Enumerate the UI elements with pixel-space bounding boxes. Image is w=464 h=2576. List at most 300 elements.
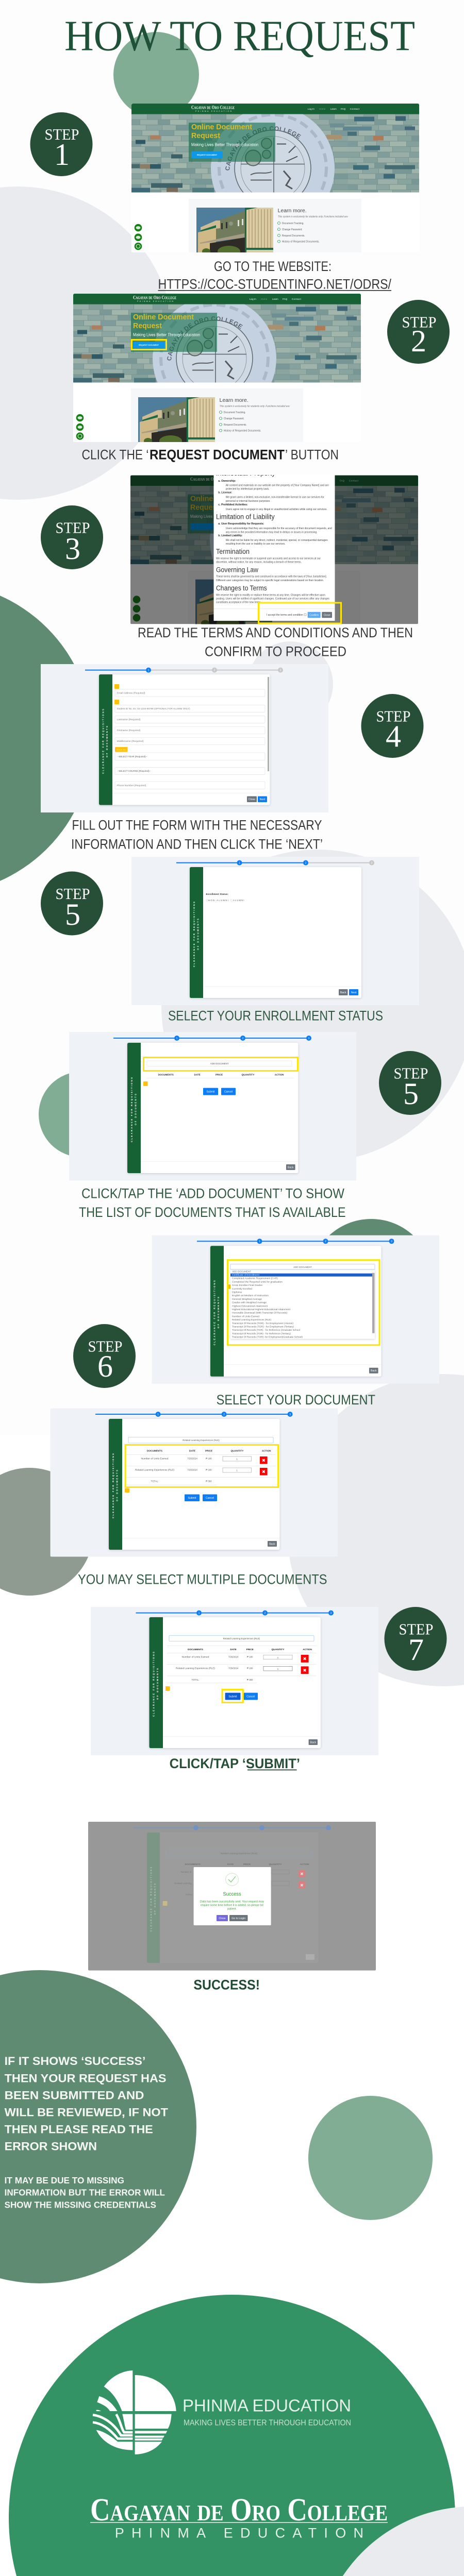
form card: ACTION bbox=[303, 1648, 312, 1651]
stepper: 3 bbox=[371, 861, 373, 865]
screenshot: step 3 terms and conditions bbox=[130, 469, 418, 629]
form card: Student ID No. Ex: 02-1234-56789 (OPTIONAL FOR ALUMNI ONLY) bbox=[117, 707, 190, 710]
terms modal: Termination bbox=[216, 548, 250, 555]
terms modal: These terms shall be governed by and construed in accordance with the laws of [Your Jurisdiction]. bbox=[216, 575, 327, 579]
nav bar: Learn bbox=[330, 108, 337, 110]
terms modal: c. Prohibited Activities: bbox=[218, 503, 248, 506]
form card: DOCUMENTS bbox=[158, 1074, 174, 1076]
form card: DATE bbox=[230, 1648, 237, 1651]
form card: 1 bbox=[277, 1668, 279, 1670]
caption: select document: SELECT YOUR DOCUMENT bbox=[217, 1392, 375, 1408]
terms modal: Different user categories may be subject to specific legal considerations based on their location. bbox=[216, 579, 324, 582]
note text: success explanation: THEN YOUR REQUEST HAS bbox=[5, 2072, 167, 2084]
screenshot: step 7 submit bbox=[91, 1607, 378, 1755]
screenshot: step 3 terms and conditions: Making Lives Better Through Education bbox=[190, 514, 257, 519]
step 7 badge: 7 bbox=[408, 1633, 424, 1667]
stepper: 3 bbox=[330, 1612, 332, 1615]
learn more panel: This system is exclusively for students only. Functions included are: bbox=[220, 405, 290, 408]
step 1 badge bbox=[30, 112, 93, 176]
success modal bbox=[194, 1867, 271, 1925]
terms modal: All content and materials on our website are the property of [Your Company Name] and are bbox=[226, 484, 329, 487]
screenshot: step 3 terms and conditions: Contact bbox=[349, 480, 359, 482]
note text: success explanation: ERROR SHOWN bbox=[5, 2140, 97, 2153]
caption: success: SUCCESS! bbox=[193, 1977, 260, 1993]
terms modal: personal or internal business purposes. bbox=[226, 500, 271, 503]
terms modal: Confirm bbox=[309, 614, 319, 617]
step 2 badge bbox=[387, 300, 450, 364]
hero overlay panel: Online Document bbox=[133, 313, 194, 321]
caption: multiple documents: YOU MAY SELECT MULTIPLE DOCUMENTS bbox=[78, 1572, 327, 1587]
decorative circle: bottom right light green bbox=[308, 2096, 433, 2220]
screenshot: multiple documents bbox=[51, 1409, 338, 1557]
form card: TOTAL: bbox=[151, 1480, 158, 1483]
success modal: require some time before it is added, so please be bbox=[201, 1904, 263, 1907]
form card: Submit bbox=[228, 1695, 237, 1698]
learn more panel: History of Requested Documents. bbox=[224, 430, 261, 433]
screenshot: step 3 terms and conditions: FAQ bbox=[340, 480, 345, 482]
hero photo bbox=[73, 304, 361, 382]
screenshot: step 4 form bbox=[41, 664, 328, 812]
document dropdown bbox=[230, 1264, 375, 1339]
nav bar: Contact bbox=[350, 108, 360, 110]
terms modal: Users acknowledge that they are responsible for the accuracy of their document requests, and bbox=[226, 527, 332, 530]
hero overlay panel: REQUEST DOCUMENT bbox=[197, 154, 218, 156]
side icons bbox=[135, 224, 142, 250]
note text: missing information: INFORMATION BUT THE ERROR WILL bbox=[5, 2188, 165, 2198]
form card: Submit bbox=[206, 1090, 215, 1093]
terms modal: We reserve the right to modify or replace these terms at any time. Changes will be effective upon bbox=[216, 594, 325, 597]
terms modal: a. Ownership: bbox=[218, 480, 236, 483]
nav bar: Learn bbox=[272, 298, 278, 300]
note text: missing information bbox=[5, 2175, 165, 2210]
caption: step 1: HTTPS://COC-STUDENTINFO.NET/ODRS/ bbox=[158, 276, 392, 292]
form card: 7/26/2024 bbox=[228, 1656, 239, 1658]
form card: Enrollment Status: bbox=[206, 893, 229, 895]
caption: step 3 bbox=[138, 625, 413, 659]
form card bbox=[210, 1246, 382, 1377]
stepper: 2 bbox=[214, 669, 216, 672]
form card bbox=[190, 867, 361, 998]
screenshot: step 1 website home bbox=[131, 104, 419, 252]
step 6 badge bbox=[73, 1324, 136, 1388]
caption: step 2 bbox=[81, 447, 339, 463]
dimmed form card bbox=[147, 1833, 319, 1963]
stepper bbox=[85, 668, 283, 673]
hero overlay panel: Making Lives Better Through Education bbox=[133, 332, 200, 337]
terms modal: Governing Law bbox=[216, 566, 258, 574]
document dropdown: Completed the Required units for graduation bbox=[232, 1280, 283, 1283]
terms modal: Intellectual Property bbox=[216, 469, 275, 477]
nav bar: Log In bbox=[308, 108, 314, 110]
stepper: 3 bbox=[289, 1413, 291, 1416]
caption: add document bbox=[79, 1186, 345, 1220]
learn more panel: Document Tracking. bbox=[224, 411, 246, 414]
document dropdown: Related Learning Experiences (RLE) bbox=[232, 1318, 271, 1321]
highlight box bbox=[222, 1690, 243, 1702]
form card: Cancel bbox=[224, 1090, 233, 1093]
logo: PHINMA Education: PHINMA EDUCATION bbox=[183, 2397, 351, 2415]
hero overlay panel: REQUEST DOCUMENT bbox=[139, 344, 159, 346]
stepper: 2 bbox=[305, 861, 307, 865]
highlight box bbox=[125, 1445, 278, 1487]
step 4 badge: 4 bbox=[386, 719, 401, 753]
document dropdown: Transcript Of Records (TOR) - for Reference (Graduate School bbox=[232, 1329, 300, 1332]
form card: OF DOCUMENTS bbox=[156, 1668, 159, 1700]
note text: success explanation: THEN PLEASE READ THE bbox=[5, 2123, 153, 2136]
caption: add document: THE LIST OF DOCUMENTS THAT IS AVAILABLE bbox=[79, 1205, 345, 1220]
stepper: 2 bbox=[325, 1240, 326, 1243]
learn more panel bbox=[189, 199, 361, 257]
form card: CLEARANCE FOR REQUISITIONS bbox=[213, 1280, 216, 1345]
hero overlay panel: Request bbox=[133, 321, 162, 330]
form card: ADD DOCUMENT bbox=[210, 1062, 229, 1065]
form card: PRICE bbox=[205, 1450, 212, 1452]
form card: Back bbox=[371, 1369, 377, 1372]
form card: DOCUMENTS bbox=[188, 1648, 203, 1651]
step 5 second badge: 5 bbox=[403, 1077, 419, 1111]
nav bar: FAQ bbox=[341, 108, 346, 110]
stepper bbox=[136, 1611, 334, 1616]
decorative circle: left grey green bbox=[0, 1468, 93, 1596]
form card: Next bbox=[351, 991, 357, 994]
caption: step 4: FILL OUT THE FORM WITH THE NECESSARY bbox=[72, 818, 322, 833]
stepper: 3 bbox=[391, 1240, 392, 1243]
step 7 badge bbox=[385, 1607, 446, 1671]
form card: CLEARANCE FOR REQUISITIONS bbox=[102, 709, 104, 774]
decorative circle: note background bbox=[0, 1970, 196, 2283]
nav bar: Cagayan de Oro College bbox=[191, 106, 235, 111]
stepper: 3 bbox=[308, 1037, 310, 1040]
document dropdown: General Weighted Average bbox=[232, 1298, 262, 1301]
dimmed form card: TOTAL: bbox=[186, 1893, 193, 1896]
nav bar: Home bbox=[319, 108, 326, 110]
form card: Middlename (Required) bbox=[117, 740, 144, 742]
caption: step 1 bbox=[158, 259, 392, 292]
screenshot: step 6 document list bbox=[152, 1235, 439, 1384]
form card: Click Me bbox=[117, 748, 127, 751]
hero overlay panel bbox=[189, 123, 275, 162]
form card: PRICE bbox=[216, 1074, 223, 1076]
learn more panel: Document Tracking. bbox=[282, 222, 304, 225]
form card: 7/26/2024 bbox=[187, 1468, 197, 1471]
form card: Number of Units Earned bbox=[141, 1457, 169, 1460]
form card: OF DOCUMENTS bbox=[217, 1297, 220, 1328]
terms modal: We grant users a limited, non-exclusive, non-transferable license to use our services for bbox=[226, 496, 324, 499]
step 6 badge: 6 bbox=[97, 1349, 113, 1383]
form card: ✖ bbox=[262, 1469, 266, 1475]
decorative circle: mid right green bbox=[309, 1219, 433, 1343]
step 2 badge: 2 bbox=[411, 324, 426, 358]
step 3 badge: 3 bbox=[65, 532, 80, 566]
form card: Related Learning Experiences (RLE) bbox=[183, 1439, 220, 1442]
document dropdown: Highest Educational Highest Educational Attainment bbox=[232, 1308, 291, 1311]
hero photo: CAGAYAN DE ORO COLLEGE bbox=[167, 316, 243, 361]
form card: Cancel bbox=[206, 1497, 214, 1500]
form card: OF DOCUMENTS bbox=[106, 726, 108, 757]
hero photo bbox=[131, 114, 419, 193]
success modal: patient. bbox=[227, 1907, 237, 1910]
form card: OF DOCUMENTS bbox=[115, 1470, 118, 1501]
stepper: 2 bbox=[264, 1612, 266, 1615]
dimmed form card: Related Learning Experiences (RLE) bbox=[221, 1852, 258, 1855]
terms modal bbox=[213, 469, 335, 621]
caption: step 3: CONFIRM TO PROCEED bbox=[205, 644, 346, 659]
form card: ACTION bbox=[275, 1074, 284, 1076]
form card: Back bbox=[340, 991, 346, 994]
decorative circle: corner grey bbox=[343, 2507, 464, 2576]
form card: Submit bbox=[188, 1497, 196, 1500]
screenshot: success bbox=[88, 1822, 376, 1971]
terms modal: I accept the terms and condition bbox=[267, 614, 303, 617]
learn more panel bbox=[131, 388, 303, 447]
form card: 7/26/2024 bbox=[187, 1457, 197, 1460]
form card: QUANTITY bbox=[230, 1450, 243, 1452]
step 5 badge bbox=[41, 872, 103, 936]
title: HOW TO REQUEST bbox=[64, 12, 415, 60]
terms modal: protected by intellectual property laws. bbox=[226, 488, 270, 491]
icon: PHINMA mark bbox=[93, 2370, 176, 2454]
caption: step 2: CLICK THE ‘ bbox=[81, 447, 148, 463]
caption: step 3: READ THE TERMS AND CONDITIONS AND THEN bbox=[138, 625, 413, 640]
note text: success explanation: WILL BE REVIEWED, IF NOT bbox=[5, 2106, 168, 2119]
dimmed form card: DATE bbox=[227, 1863, 234, 1866]
nav bar: Log In bbox=[250, 298, 256, 300]
terms modal: resulting from the use or inability to use our services. bbox=[226, 543, 286, 546]
nav bar: PHINMA EDUCATION bbox=[195, 110, 231, 112]
form card: OF DOCUMENTS bbox=[134, 1094, 137, 1125]
form card: Cancel bbox=[246, 1695, 255, 1698]
form card: ✖ bbox=[303, 1668, 307, 1673]
footer circle bbox=[9, 2295, 455, 2576]
form card: DATE bbox=[194, 1074, 201, 1076]
terms modal: Changes to Terms bbox=[216, 584, 267, 592]
document dropdown: Transcript Of Records (TOR) - for Employment (Alumni) bbox=[232, 1322, 293, 1325]
step 7 badge: STEP bbox=[399, 1620, 433, 1638]
caption: step 1: GO TO THE WEBSITE: bbox=[214, 259, 332, 274]
terms modal: We reserve the right to terminate or suspend user accounts and access to our services at our bbox=[216, 557, 321, 561]
icon: check circle bbox=[226, 1873, 238, 1886]
hero photo: CAGAYAN DE ORO COLLEGE bbox=[225, 126, 301, 171]
decorative circle: left dark green bbox=[0, 582, 93, 894]
form card: Back bbox=[310, 1741, 316, 1744]
success modal: Data has been successfully sent. Your request may bbox=[200, 1900, 264, 1903]
form card: Related Learning Experiences (RLE) bbox=[223, 1637, 260, 1640]
learn more panel: Request Documents. bbox=[224, 423, 247, 427]
stepper: 2 bbox=[223, 1413, 225, 1416]
terms modal: discretion, without notice, for any reason, including a breach of these terms. bbox=[216, 561, 302, 564]
highlight box bbox=[228, 1260, 379, 1345]
success modal: Close bbox=[219, 1917, 226, 1920]
document dropdown: Transcript Of Records (TOR) - for Reference (Tertiary) bbox=[232, 1332, 291, 1335]
form card: 7/29/2024 bbox=[228, 1667, 239, 1669]
form card: QUANTITY bbox=[241, 1074, 255, 1076]
caption: submit: CLICK/TAP ‘SUBMIT’ bbox=[170, 1756, 300, 1771]
form card bbox=[99, 674, 270, 805]
hero overlay panel: Making Lives Better Through Education bbox=[191, 142, 258, 147]
stepper: 1 bbox=[239, 861, 240, 865]
nav bar bbox=[73, 294, 361, 304]
step 3 badge: STEP bbox=[56, 518, 90, 537]
form card: OF DOCUMENTS bbox=[197, 919, 199, 950]
form card: ₱ 360 bbox=[206, 1480, 212, 1483]
highlight box bbox=[132, 340, 166, 349]
document dropdown: ADD DOCUMENT bbox=[232, 1270, 251, 1273]
dimmed form card: Number of bbox=[181, 1871, 192, 1873]
stepper bbox=[133, 1825, 331, 1831]
dimmed form card: ✖ bbox=[300, 1883, 304, 1888]
decorative circle: lower right grey bbox=[287, 1374, 464, 1686]
highlight box bbox=[143, 1057, 298, 1071]
stepper: 1 bbox=[259, 1240, 260, 1243]
document dropdown: Diploma bbox=[232, 1291, 242, 1294]
nav bar: PHINMA EDUCATION bbox=[137, 300, 173, 302]
stepper bbox=[197, 1239, 394, 1244]
form card: QUANTITY bbox=[271, 1648, 285, 1651]
form card bbox=[150, 1617, 321, 1748]
form card: CLEARANCE FOR REQUISITIONS bbox=[130, 1077, 133, 1142]
form card: Back bbox=[288, 1166, 294, 1169]
terms modal: posting. Users will be notified of significant changes. Continued use of our services after any changes bbox=[216, 597, 329, 600]
form card: ACTION bbox=[262, 1450, 271, 1452]
step 5 second badge: STEP bbox=[394, 1064, 428, 1082]
document dropdown: English as Medium of Instruction bbox=[232, 1294, 269, 1297]
logo: Cagayan de Oro College bbox=[90, 2493, 388, 2541]
form card: ✖ bbox=[303, 1657, 307, 1662]
caption: step 4 bbox=[71, 818, 323, 852]
terms modal: Close bbox=[324, 614, 330, 617]
logo: Cagayan de Oro College: Cagayan de Oro College bbox=[90, 2493, 388, 2528]
step 3 badge bbox=[41, 505, 103, 569]
form card: CLEARANCE FOR REQUISITIONS bbox=[153, 1652, 155, 1717]
form card: TOTAL: bbox=[192, 1679, 199, 1681]
note text: success explanation: BEEN SUBMITTED AND bbox=[5, 2089, 144, 2102]
form card: Phone Number (Required) bbox=[117, 784, 146, 787]
stepper: 3 bbox=[280, 669, 281, 672]
terms modal: Limitation of Liability bbox=[216, 513, 275, 521]
document dropdown: Honorable Dismissal (With Transcript Of Records) bbox=[232, 1312, 287, 1315]
form card: 1 bbox=[236, 1469, 238, 1471]
form card: CLEARANCE FOR REQUISITIONS bbox=[193, 902, 195, 967]
document dropdown: Certificate of Enrollment bbox=[232, 1274, 260, 1277]
form card: ✖ bbox=[262, 1458, 266, 1463]
form card: ₱ 180 bbox=[206, 1457, 212, 1460]
dimmed form card: CLEARANCE FOR REQUISITIONS bbox=[150, 1867, 153, 1932]
caption: step 2: ’ BUTTON bbox=[285, 447, 339, 463]
terms modal: any errors in the provided information may lead to delays or issues in processing. bbox=[226, 531, 318, 534]
form card: ₱ 180 bbox=[247, 1667, 253, 1669]
form card: ₱ 180 bbox=[206, 1468, 212, 1471]
form card: NON-ALUMNI bbox=[208, 899, 228, 902]
learn more panel: Learn more. bbox=[220, 398, 248, 403]
stepper: 2 bbox=[242, 1037, 244, 1040]
stepper bbox=[95, 1412, 293, 1417]
document dropdown: Transcript Of Records (TOR) -for Employment(Graduate School) bbox=[232, 1336, 303, 1339]
nav bar: Contact bbox=[292, 298, 302, 300]
form card: Number of Units Earned bbox=[181, 1656, 209, 1658]
hero overlay panel bbox=[131, 313, 217, 352]
dimmed form card: DOCUMENTS bbox=[185, 1863, 201, 1866]
form card: ALUMNI bbox=[233, 899, 244, 902]
form card: ₱ 180 bbox=[247, 1656, 253, 1658]
note text: success explanation bbox=[5, 2055, 168, 2153]
terms modal: a. User Responsibility for Requests: bbox=[218, 522, 264, 526]
step 4 badge bbox=[361, 694, 424, 758]
step 6 badge: STEP bbox=[88, 1337, 123, 1355]
stepper bbox=[176, 860, 374, 866]
step 2 badge: STEP bbox=[402, 313, 436, 331]
dimmed form card: ACTION bbox=[300, 1863, 309, 1866]
dimmed form card: ✖ bbox=[300, 1872, 304, 1876]
caption: enrollment status: SELECT YOUR ENROLLMENT STATUS bbox=[168, 1008, 383, 1023]
form card: CLEARANCE FOR REQUISITIONS bbox=[112, 1453, 114, 1518]
form card: --SELECT COURSE (Required)-- bbox=[118, 770, 151, 772]
document dropdown: Currently Enrolled bbox=[232, 1287, 252, 1291]
form card: Close bbox=[248, 798, 255, 801]
decorative circle: left light green bbox=[39, 1072, 124, 1157]
screenshot: step 5 enrollment status bbox=[131, 857, 419, 1005]
dimmed form card: PRICE bbox=[243, 1863, 251, 1866]
decorative circle: top light green bbox=[113, 32, 199, 117]
note text: missing information: IT MAY BE DUE TO MISSING bbox=[5, 2175, 124, 2185]
form card: Firstname (Required) bbox=[117, 729, 141, 732]
terms modal: constitutes acceptance of the new terms. bbox=[216, 601, 261, 604]
highlight box bbox=[259, 603, 341, 623]
form card: ₱ 360 bbox=[247, 1679, 253, 1681]
caption: step 2: REQUEST DOCUMENT bbox=[150, 447, 285, 463]
form card: PRICE bbox=[246, 1648, 254, 1651]
nav bar: FAQ bbox=[283, 298, 288, 300]
screenshot: step 5 add document bbox=[69, 1032, 356, 1181]
form card: DATE bbox=[189, 1450, 195, 1452]
stepper: 1 bbox=[157, 1413, 159, 1416]
dimmed form card: OF DOCUMENTS bbox=[154, 1883, 156, 1914]
nav bar: Cagayan de Oro College bbox=[133, 296, 176, 301]
nav bar bbox=[131, 104, 419, 114]
success modal: Success bbox=[223, 1892, 241, 1897]
screenshot: step 3 terms and conditions: Online Document bbox=[190, 495, 251, 503]
terms modal: b. License: bbox=[218, 492, 233, 495]
step 1 badge: 1 bbox=[54, 138, 70, 172]
caption: add document: CLICK/TAP THE ‘ADD DOCUMENT’ TO SHOW bbox=[81, 1186, 344, 1201]
step 5 badge: 5 bbox=[65, 897, 80, 931]
stepper: 1 bbox=[176, 1037, 178, 1040]
logo: PHINMA Education bbox=[93, 2370, 351, 2454]
learn more panel: Change Password. bbox=[224, 417, 244, 420]
form card: --SELECT YEAR (Required)-- bbox=[118, 755, 147, 758]
learn more panel: This system is exclusively for students only. Functions included are: bbox=[278, 215, 349, 218]
success modal: Go to Login bbox=[231, 1917, 245, 1920]
form card: Related Learning Experiences (RLE) bbox=[135, 1468, 175, 1471]
form card: Lastname (Required) bbox=[117, 718, 141, 721]
step 1 badge: STEP bbox=[44, 125, 79, 143]
terms modal: Users agree not to engage in any illegal or unauthorized activities while using our services. bbox=[226, 508, 327, 511]
learn more panel: Change Password. bbox=[282, 228, 303, 231]
step 4 badge: STEP bbox=[376, 707, 410, 725]
screenshot: step 3 terms and conditions: Cagayan de Oro College bbox=[190, 477, 234, 482]
form card: Email Address (Required) bbox=[117, 691, 145, 694]
step 5 badge: STEP bbox=[56, 885, 90, 903]
document dropdown: Cross Enrollee Final Grades bbox=[232, 1284, 263, 1287]
document dropdown: Transcript Of Records (TOR) - for Employment (Tertiary) bbox=[232, 1325, 294, 1328]
screenshot: step 3 terms and conditions: Request bbox=[190, 503, 219, 512]
hero overlay panel: Online Document bbox=[191, 123, 252, 131]
decorative circle: upper left grey bbox=[0, 187, 174, 500]
form card: DOCUMENTS bbox=[147, 1450, 162, 1452]
learn more panel: Learn more. bbox=[278, 208, 307, 214]
learn more panel: Request Documents. bbox=[282, 234, 305, 238]
terms modal: We shall not be liable for any direct, indirect, incidental, special, or consequential damages bbox=[226, 539, 328, 542]
note text: missing information: SHOW THE MISSING CREDENTIALS bbox=[5, 2200, 156, 2210]
